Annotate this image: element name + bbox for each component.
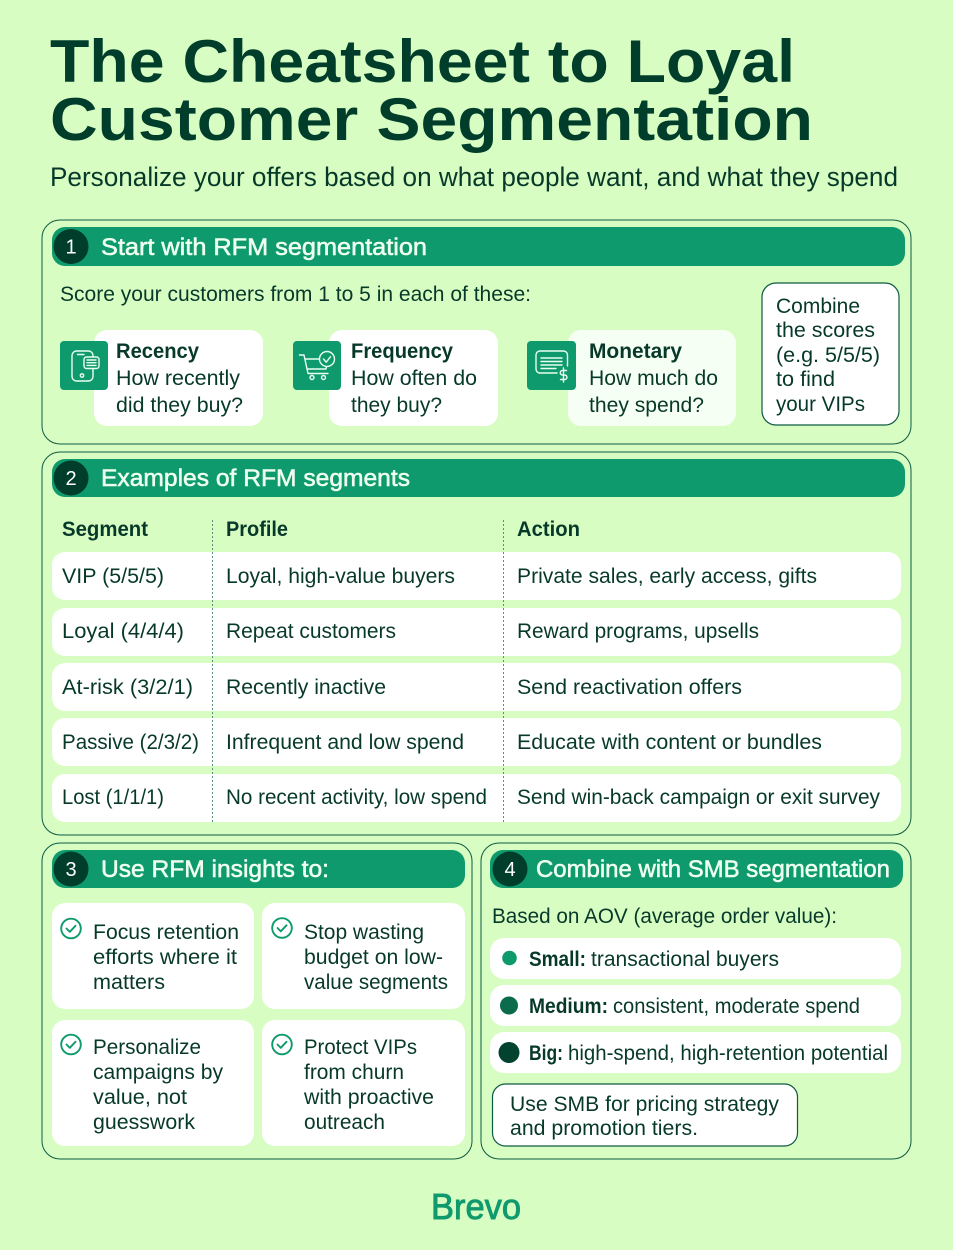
panel: use RFM insights [42,843,472,1159]
card: recency: How recently [116,367,240,390]
card: protect VIPs: with proactive [303,1086,434,1109]
section 3 header [52,850,465,888]
title: Customer Segmentation [50,86,813,153]
card: personalize: campaigns by [93,1061,223,1084]
card: monetary [527,330,736,426]
card: personalize: Personalize [93,1036,201,1059]
row: big: Big: [529,1042,563,1065]
section 1 header [52,227,905,266]
row: VIP [52,552,901,600]
section 3 header: 3 [65,859,77,881]
card: focus retention: matters [93,971,165,994]
table column headers: Segment [62,518,148,541]
row: Passive: Passive (2/3/2) [62,731,199,754]
row: medium: consistent, moderate spend [613,995,860,1018]
callout: use SMB: Use SMB for pricing strategy [510,1093,779,1116]
row: Passive: Educate with content or bundles [517,731,822,754]
card: focus retention: Focus retention [93,921,239,944]
row: big [490,1032,901,1073]
card: stop wasting: budget on low- [304,946,443,969]
row: Loyal: Repeat customers [226,620,396,643]
section 4 header: Combine with SMB segmentation [536,856,890,883]
icon: check circle [61,919,81,938]
callout: combine the scores: to find [776,368,835,391]
row: Passive [52,718,901,766]
callout: combine the scores: the scores [776,319,875,342]
table column headers: Action [517,518,580,541]
card: protect VIPs: outreach [304,1111,385,1134]
card: frequency: they buy? [351,394,442,417]
row: Loyal: Loyal (4/4/4) [62,620,184,643]
section 2 header: Examples of RFM segments [101,465,410,492]
card: protect VIPs [262,1020,465,1146]
icon: check circle [272,1035,292,1054]
section 2 header [52,459,905,497]
row: Lost [52,774,901,822]
row: At-risk [52,663,901,711]
table column headers [62,518,580,541]
section 1 header: Start with RFM segmentation [101,234,427,261]
icon: invoice with dollar sign [536,351,568,382]
row: small [490,938,901,979]
logo: Brevo: Brevo [431,1186,521,1227]
row: Lost: Send win-back campaign or exit survey [517,786,880,809]
card: monetary: How much do [589,367,718,390]
callout: combine the scores [762,283,899,425]
subtitle: Personalize your offers based on what people want, and what they spend [50,162,898,192]
card: personalize [52,1020,254,1146]
icon: phone with message [72,351,99,381]
section 2 header: 2 [65,468,77,490]
row: VIP: Loyal, high-value buyers [226,565,455,588]
row: At-risk: At-risk (3/2/1) [62,676,193,699]
card: monetary: they spend? [589,394,704,417]
card: stop wasting: value segments [304,971,448,994]
card: protect VIPs: Protect VIPs [304,1036,417,1059]
section 3 header: Use RFM insights to: [101,856,329,883]
title: The Cheatsheet to Loyal [50,28,795,95]
section 4 header: 4 [504,859,516,881]
intro text: Based on AOV (average order value): [492,905,837,928]
row: medium: Medium: [529,995,608,1018]
card: focus retention: efforts where it [93,946,237,969]
panel: start with RFM segmentation [42,220,911,444]
row: At-risk: Send reactivation offers [517,676,742,699]
card: stop wasting: Stop wasting [304,921,424,944]
card: focus retention [52,903,254,1009]
card: personalize: value, not [93,1086,187,1109]
row: At-risk: Recently inactive [226,676,386,699]
panel: examples of RFM segments [42,452,911,835]
callout: use SMB [492,1084,798,1146]
row: Loyal: Reward programs, upsells [517,620,759,643]
title [50,28,813,153]
row: big: high-spend, high-retention potential [568,1042,888,1065]
icon: shopping cart with check [300,352,334,380]
callout: combine the scores: your VIPs [776,393,865,416]
row: Lost: Lost (1/1/1) [62,786,164,809]
row: Loyal [52,608,901,656]
callout: combine the scores: (e.g. 5/5/5) [776,344,880,367]
row: small: Small: [529,948,586,971]
intro text: Score your customers from 1 to 5 in each of these: [60,283,531,306]
row: VIP: Private sales, early access, gifts [517,565,817,588]
card: frequency [293,330,498,426]
icon: check circle [61,1035,81,1054]
row: medium [490,985,901,1026]
row: Passive: Infrequent and low spend [226,731,464,754]
row: Lost: No recent activity, low spend [226,786,487,809]
card: personalize: guesswork [93,1111,195,1134]
icon: check circle [272,918,292,938]
card: monetary: Monetary [589,340,682,363]
table column headers: Profile [226,518,288,541]
panel: combine with SMB segmentation [481,843,911,1159]
callout: combine the scores: Combine [776,295,860,318]
row: VIP: VIP (5/5/5) [62,565,164,588]
card: recency [60,330,263,426]
row: small: transactional buyers [591,948,779,971]
card: frequency: How often do [351,367,477,390]
section 1 header: 1 [65,236,77,258]
card: protect VIPs: from churn [304,1061,404,1084]
callout: use SMB: and promotion tiers. [510,1117,698,1140]
card: recency: did they buy? [116,394,243,417]
card: recency: Recency [116,340,199,363]
card: stop wasting [262,903,465,1009]
section 4 header [490,850,903,888]
card: frequency: Frequency [351,340,453,363]
